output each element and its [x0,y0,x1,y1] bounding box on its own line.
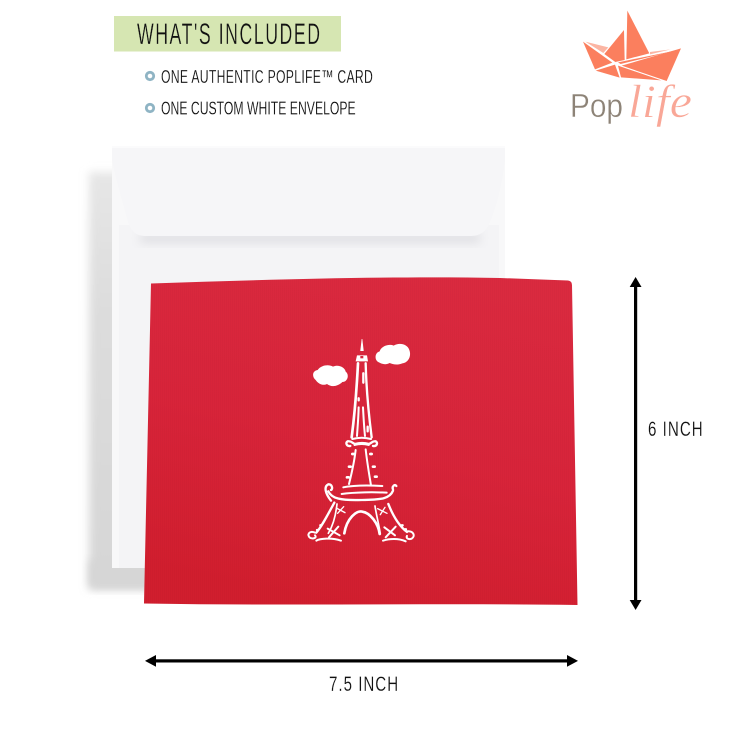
heading: what's included: WHAT'S INCLUDED [137,19,320,51]
panel: what's included [114,16,373,119]
arrow: width [145,655,578,667]
envelope flap [112,146,505,236]
icon: origami boat [583,11,681,81]
list item: card: ONE AUTHENTIC POPLIFE™ CARD [161,68,373,88]
card [144,277,578,605]
illustration: Eiffel tower [308,339,414,541]
wordmark: life: life [628,76,692,128]
card face [144,277,578,605]
icon: right cloud [376,344,410,364]
wordmark: Pop: Pop [570,87,623,124]
tower structure [308,339,414,541]
list item: envelope: ONE CUSTOM WHITE ENVELOPE [161,99,356,119]
envelope shadow [89,172,149,588]
label: 7.5 inch: 7.5 INCH [329,671,398,696]
logo: Poplife [570,11,692,128]
icon: left cloud [313,365,348,386]
envelope inner panel [119,225,499,568]
label: 6 inch: 6 INCH [648,416,703,441]
flap shadow [140,233,480,243]
arrow: height [630,277,642,610]
envelope [89,146,505,589]
envelope body [112,146,505,568]
